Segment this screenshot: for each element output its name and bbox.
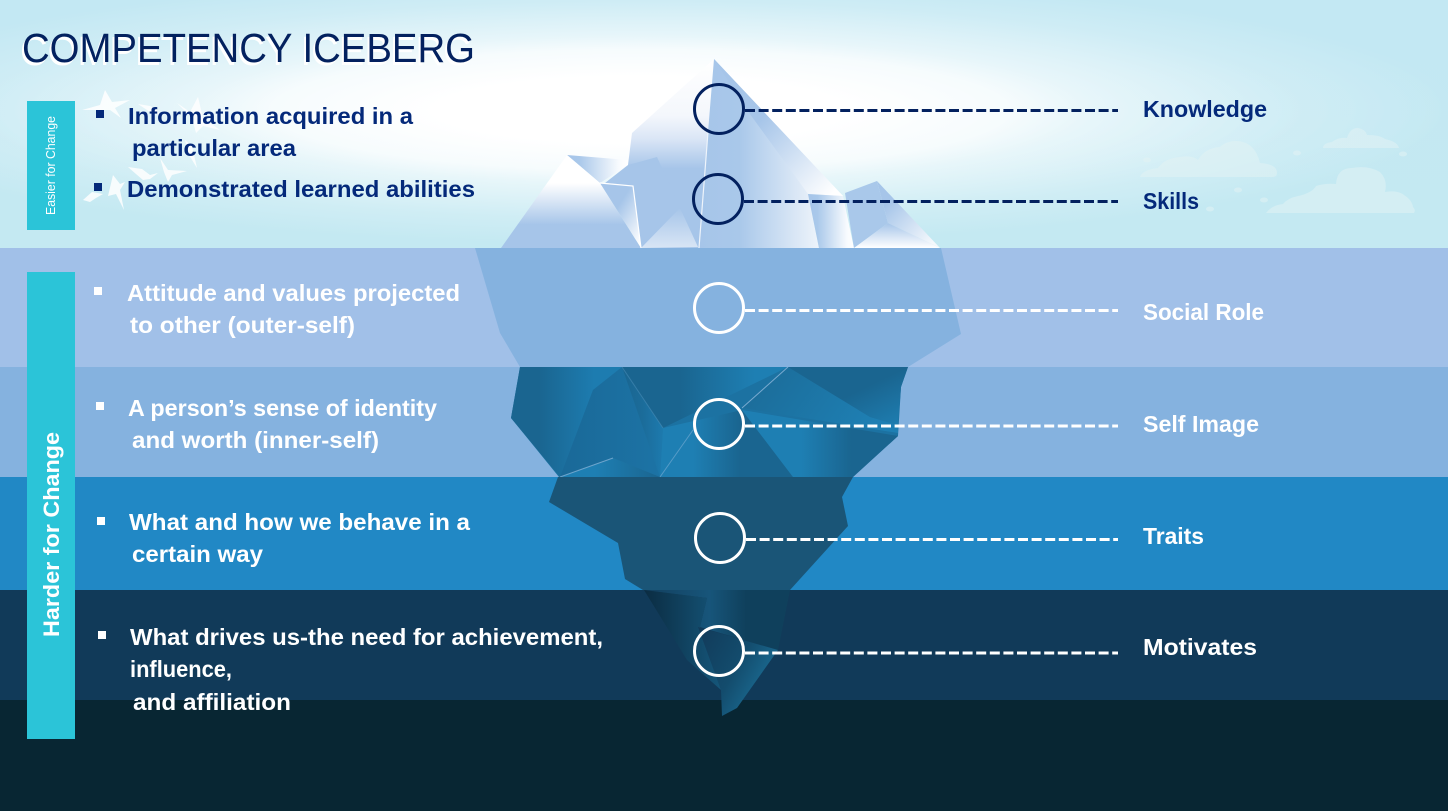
marker: social role	[694, 284, 1118, 332]
iceberg: traits tier	[549, 477, 853, 590]
water bands	[0, 248, 1448, 811]
text: traits description: What and how we behave in a	[129, 509, 470, 535]
text: traits description: certain way	[132, 541, 263, 567]
text: social role description: to other (outer-self)	[130, 312, 355, 338]
bar: harder for change	[27, 272, 75, 739]
text: self image description: and worth (inner-self)	[132, 427, 379, 453]
birds	[82, 90, 220, 210]
iceberg: above water	[501, 59, 940, 248]
clouds	[1140, 128, 1415, 213]
label: social role: Social Role	[1143, 299, 1264, 325]
text: motivates description	[98, 624, 603, 715]
title: COMPETENCY ICEBERG	[20, 28, 473, 74]
text: social role description: Attitude and values projected	[127, 280, 460, 306]
text: knowledge description: Information acquired in a	[128, 103, 413, 129]
label: traits: Traits	[1143, 523, 1204, 549]
text: self image description: A person’s sense of identity	[128, 395, 437, 421]
marker: knowledge	[694, 84, 1118, 134]
text: motivates description: influence,	[130, 656, 232, 682]
marker: skills	[694, 174, 1118, 224]
text: motivates description: What drives us-the need for achievement,	[130, 624, 603, 650]
label: skills: Skills	[1143, 188, 1199, 214]
bar: easier for change: Easier for Change	[43, 116, 58, 215]
marker: motivates	[694, 626, 1118, 676]
text: knowledge description	[96, 103, 413, 161]
text: traits description	[97, 509, 470, 567]
iceberg: motivates tier	[644, 590, 790, 716]
marker: self image	[694, 400, 1118, 448]
marker: traits	[696, 514, 1118, 562]
iceberg: social role tier	[475, 248, 961, 367]
background: sky	[0, 0, 1448, 249]
title: COMPETENCY ICEBERG	[22, 25, 475, 71]
text: knowledge description: particular area	[132, 135, 296, 161]
label: motivates: Motivates	[1143, 634, 1257, 660]
iceberg: self image tier	[511, 367, 908, 477]
text: self image description	[96, 395, 437, 453]
bar: easier for change	[27, 101, 75, 230]
text: social role description	[94, 280, 460, 338]
label: self image: Self Image	[1143, 411, 1259, 437]
bar: harder for change: Harder for Change	[39, 432, 64, 637]
text: skills description: Demonstrated learned abilities	[127, 176, 475, 202]
label: knowledge: Knowledge	[1143, 96, 1267, 122]
text: motivates description: and affiliation	[133, 689, 291, 715]
